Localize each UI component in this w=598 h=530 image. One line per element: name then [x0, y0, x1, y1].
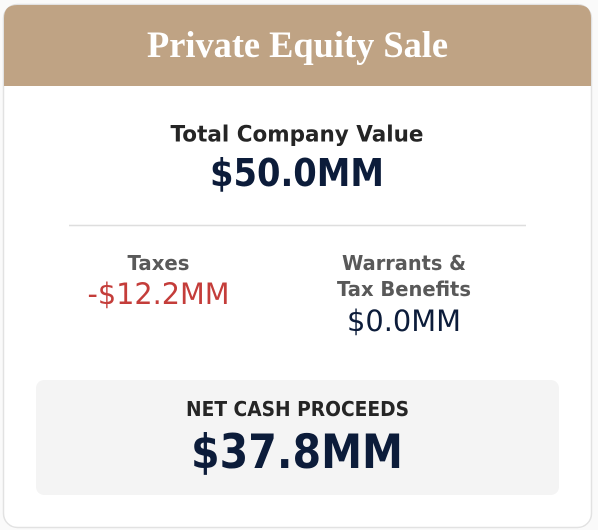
taxes label: Taxes	[128, 251, 190, 275]
total company value label: Total Company Value	[170, 122, 424, 148]
taxes amount: -$12.2MM	[88, 277, 230, 311]
net cash proceeds label: NET CASH PROCEEDS	[186, 397, 409, 421]
net cash proceeds amount: $37.8MM	[191, 425, 403, 480]
panel: net cash proceeds	[36, 380, 559, 495]
header band	[4, 5, 591, 86]
warrants and tax benefits label: Warrants &	[342, 251, 466, 275]
warrants and tax benefits amount: $0.0MM	[347, 304, 461, 338]
warrants and tax benefits label	[337, 251, 471, 301]
warrants and tax benefits label: Tax Benefits	[337, 277, 471, 301]
title: Private Equity Sale	[147, 25, 448, 66]
total company value amount: $50.0MM	[210, 151, 384, 195]
